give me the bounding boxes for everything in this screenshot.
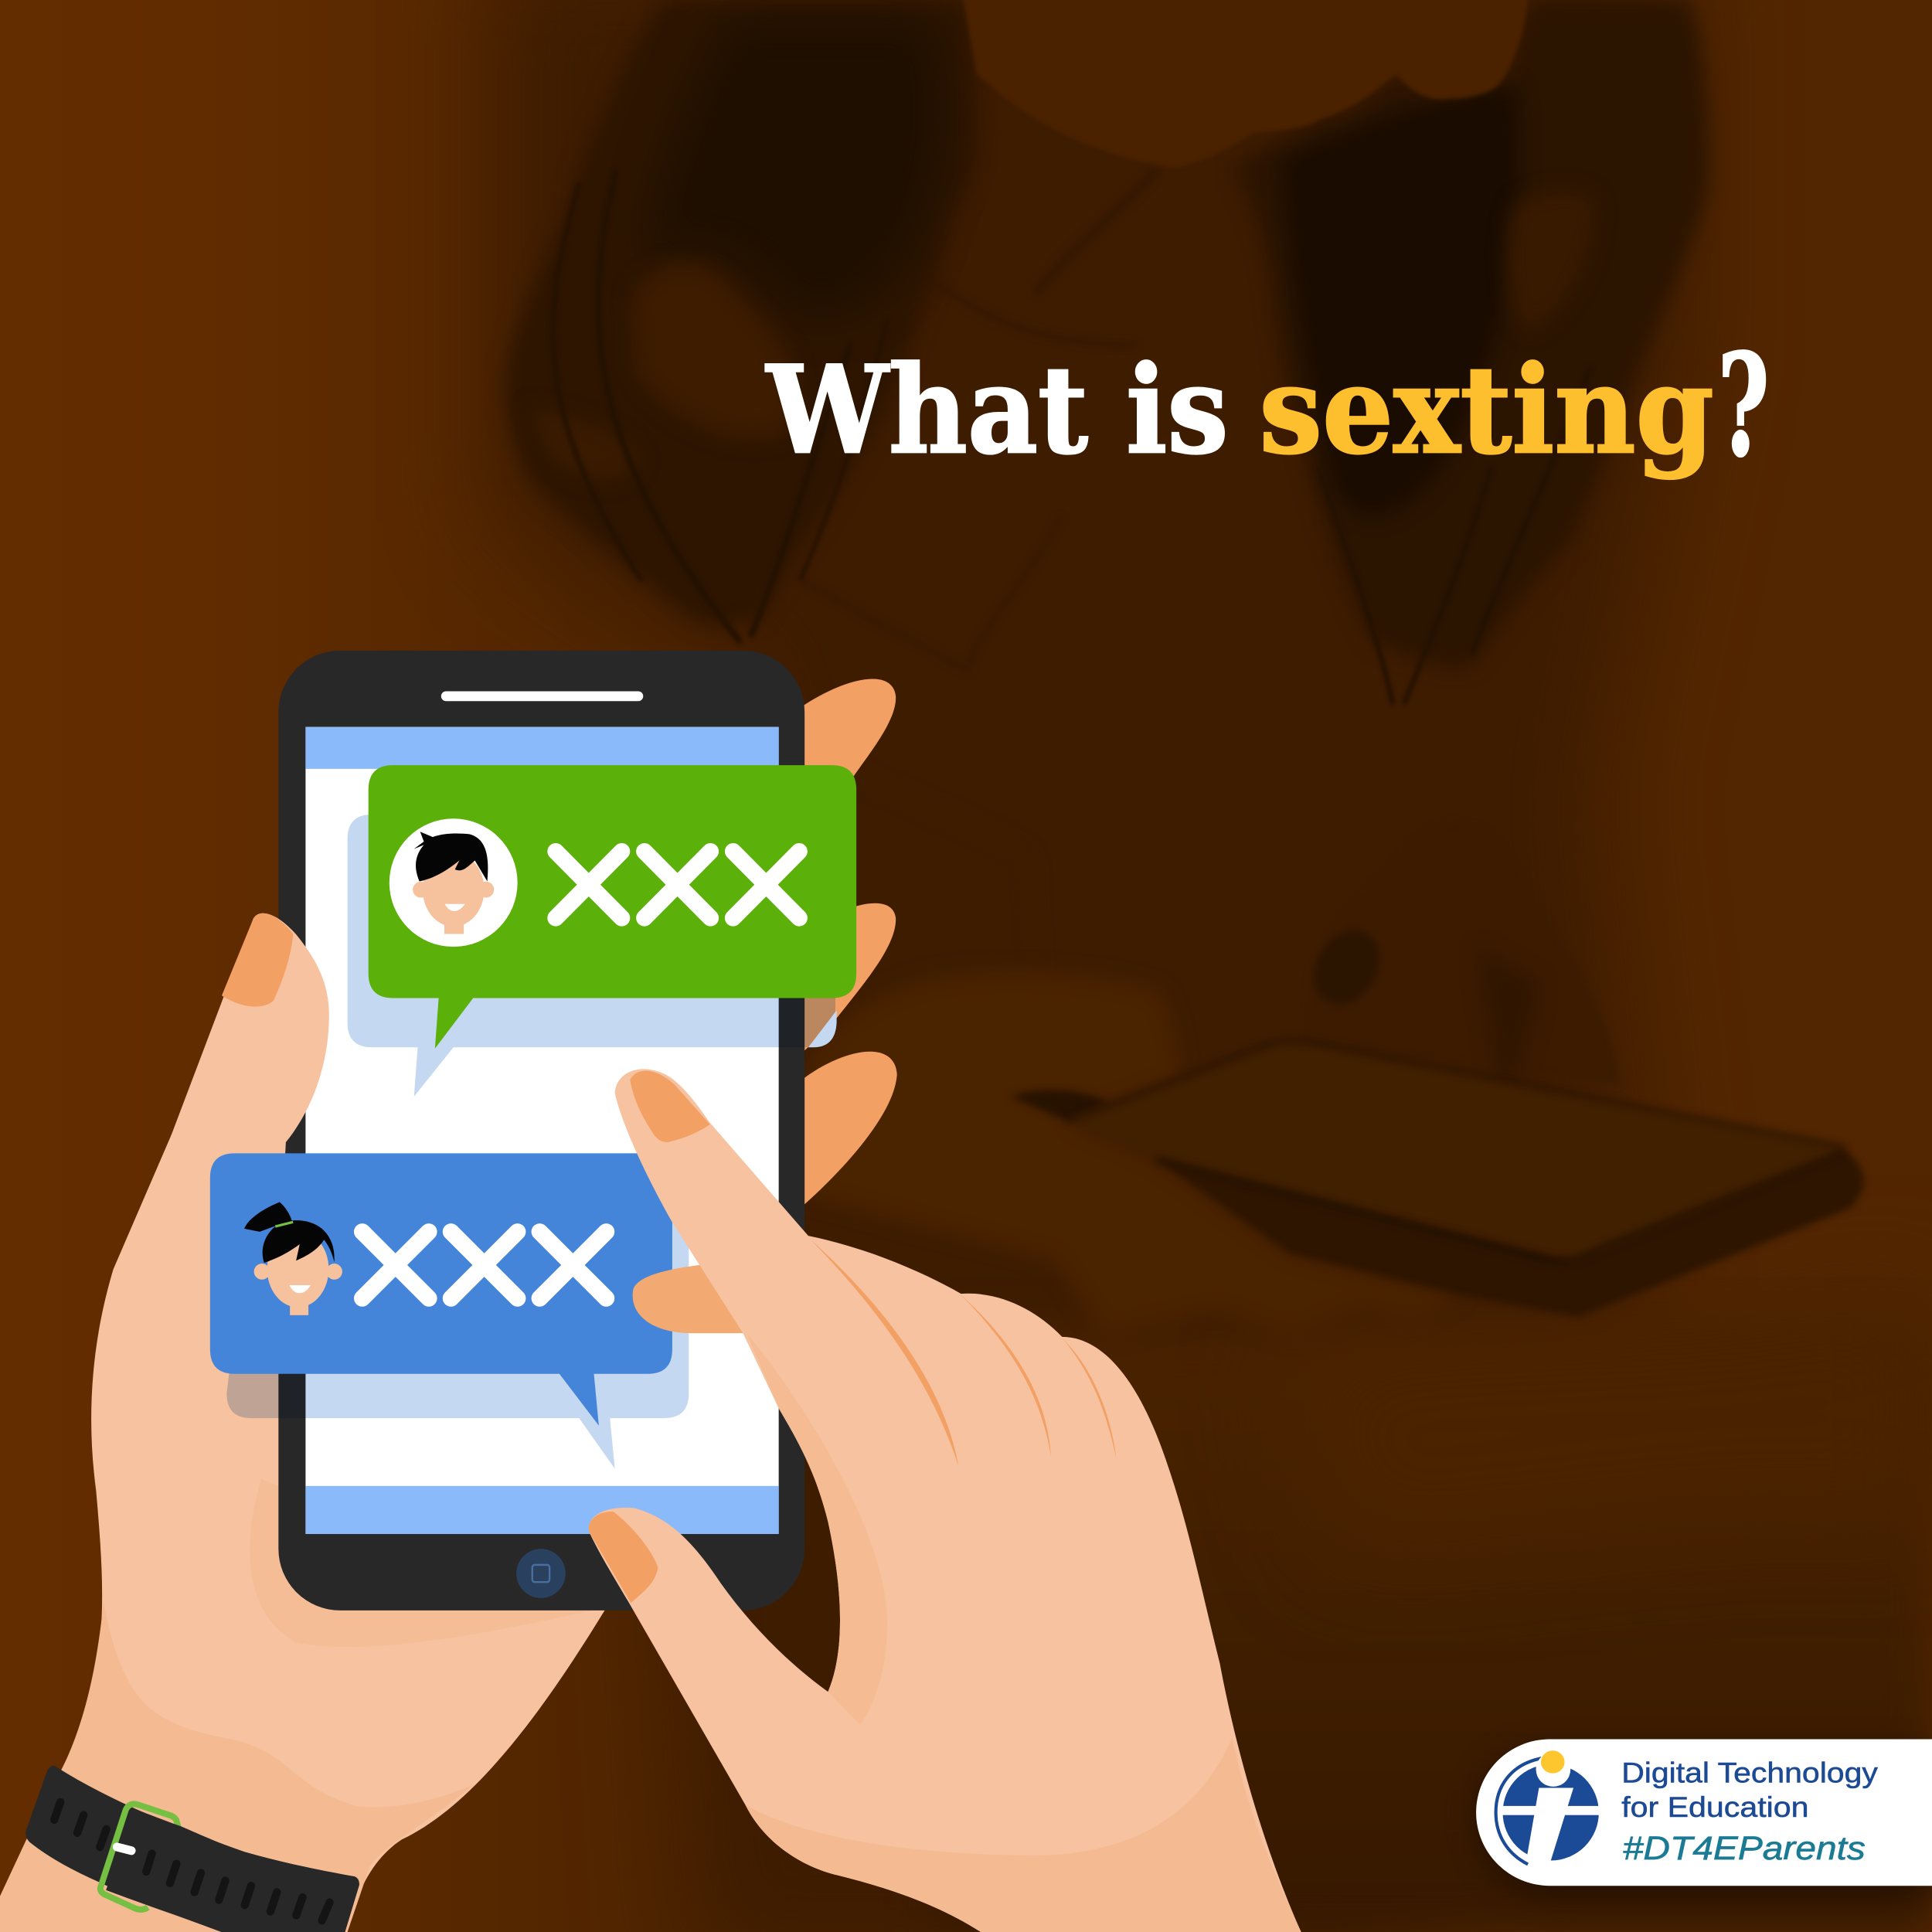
XXX on green bubble	[556, 852, 799, 918]
body and room tones	[493, 0, 1932, 1932]
XXX on blue bubble	[362, 1232, 606, 1298]
badge background	[1476, 1739, 1932, 1886]
screen top bar	[305, 727, 779, 769]
back fingers	[801, 679, 897, 1207]
watch band	[26, 1766, 359, 1932]
title: sexting	[1259, 338, 1714, 481]
left thumb nail	[222, 913, 293, 1007]
hand beneath phone	[811, 975, 1423, 1318]
strands and neckline	[1039, 173, 1155, 291]
badge shadow	[1476, 1750, 1932, 1897]
girl avatar	[244, 1202, 342, 1315]
phone in the photo	[1068, 1041, 1863, 1317]
right hand	[589, 1069, 1301, 1932]
hair left	[505, 0, 977, 624]
face	[961, 0, 1529, 168]
boy avatar	[389, 818, 518, 947]
raised hand in the photo	[1597, 1029, 1614, 1077]
shadow bubble corner	[808, 1010, 837, 1047]
shadow bubbles	[226, 815, 835, 1469]
blue message bubble	[210, 1153, 672, 1426]
logo mark	[1496, 1750, 1602, 1866]
speaker	[441, 691, 643, 701]
middle finger	[633, 1259, 764, 1333]
screen	[305, 727, 779, 1534]
knuckle lines	[811, 1240, 1117, 1466]
hair strands left	[558, 184, 849, 645]
logo text line 1: Digital Technology	[1621, 1756, 1878, 1788]
phone	[278, 651, 804, 1611]
index finger nail	[630, 1071, 710, 1142]
hair strands right	[1357, 584, 1478, 705]
title	[765, 322, 1770, 488]
left hand palm	[0, 961, 690, 1932]
logo badge	[1476, 1739, 1932, 1897]
title: What is	[765, 338, 1229, 481]
green message bubble	[369, 765, 856, 1049]
background: tinted photo of a girl looking at a phone	[417, 0, 1932, 1932]
left hand shading	[0, 1602, 474, 1932]
logo text line 2: for Education	[1621, 1791, 1809, 1823]
thumb nail	[589, 1512, 658, 1603]
hair right	[1233, 0, 1709, 667]
buckle	[100, 1804, 179, 1910]
screen bottom bar	[305, 1486, 779, 1534]
title: ?	[1718, 322, 1770, 488]
right hand shading	[747, 1333, 887, 1725]
phone body	[278, 651, 804, 1611]
buckle pin	[117, 1847, 131, 1851]
illustration: hands holding phone	[0, 651, 1301, 1932]
hashtag: #DT4EParents	[1623, 1830, 1866, 1867]
left thumb	[160, 913, 329, 1165]
home button	[516, 1549, 566, 1598]
